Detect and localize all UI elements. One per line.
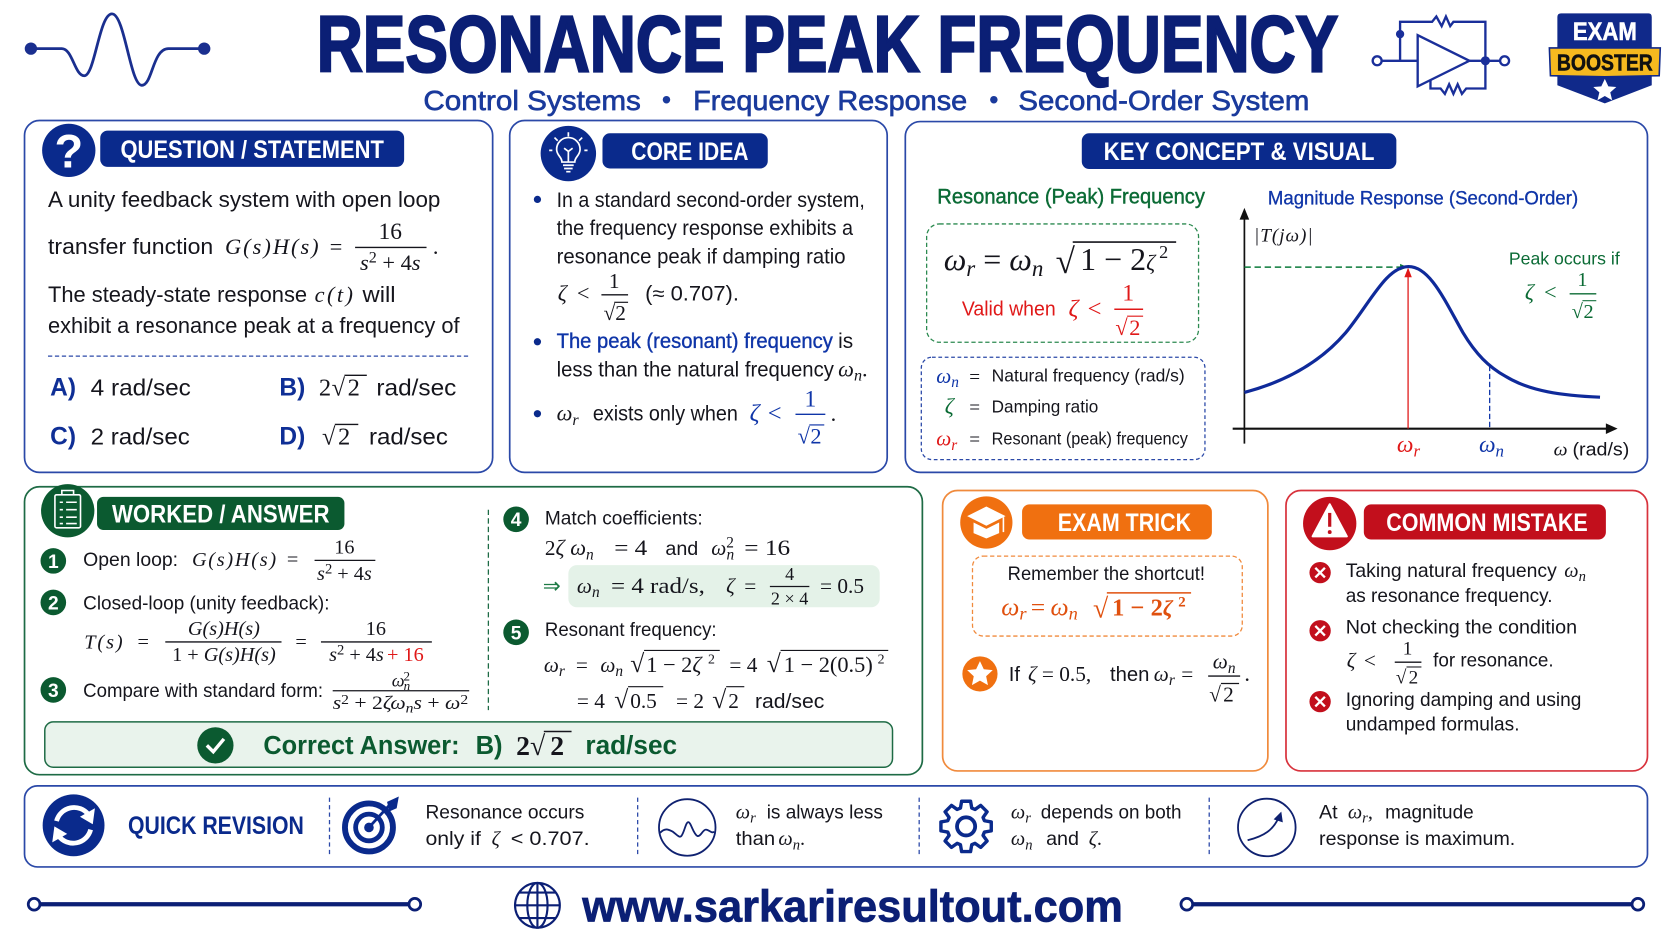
step 3: ω [392,671,405,691]
step 5: 1 − 2ζ [646,652,703,677]
legend box: = [969,430,980,451]
step 5: ω [600,653,615,677]
question text: . [433,234,439,259]
step 2: 2 [48,593,59,614]
panel: key concept and visual [905,122,1647,472]
shortcut note: = [1181,662,1193,686]
bullet 1: ζ [558,281,569,306]
bullet 3: ω [557,401,572,426]
bullet 3: 1 [805,386,816,412]
shortcut note: . [1244,661,1250,686]
footer left rule [28,898,421,910]
icon: refresh [43,794,105,856]
step 1: 1 [48,552,59,573]
icon: warning triangle [1303,497,1356,550]
question text: transfer function [48,234,213,259]
peak condition callout: 2 [1583,301,1594,323]
icon: gear [941,801,991,852]
revision item 1: < 0.707. [511,828,590,850]
revision item 4: , [1368,801,1373,823]
legend box: ω [936,427,951,451]
heading: question / statement: QUESTION / STATEMENT [120,137,384,164]
icon: target [345,797,399,851]
step 4 [503,507,880,609]
step 5: = 2 [676,689,704,713]
step 3: 2 [403,668,410,683]
answer options [50,375,457,451]
step 3: Compare with standard form: [83,680,323,702]
formula box: 1 − 2ζ [1080,242,1157,277]
step 4: n [727,546,735,563]
bullet 3: . [831,401,836,426]
bullet 2: The peak (resonant) frequency [557,330,833,353]
answer options: rad/sec [376,375,457,401]
correct answer bar: 2 [516,730,530,761]
bullet 1: 1 [609,269,620,293]
formula box: 1 [1122,281,1134,307]
revision item 3: r [1025,811,1031,827]
chart: magnitude response: ω [1397,432,1413,458]
revision item 3: ζ. [1089,828,1102,850]
chart: magnitude response: |T(jω)| [1254,226,1313,247]
heading: common mistake: COMMON MISTAKE [1386,510,1588,537]
step 5: √ [630,649,645,678]
revision item 2: ω [736,801,750,823]
revision item 2: . [800,828,805,850]
legend box: = [969,367,980,388]
peak condition callout [1509,248,1620,323]
step 5: 1 − 2(0.5) [784,652,873,677]
heading: key concept: KEY CONCEPT & VISUAL [1104,139,1375,166]
subtitle: Second-Order System [1018,85,1309,116]
revision item 3: and [1046,828,1079,850]
step 3: n [404,678,410,693]
answer options: 2 [348,375,360,402]
icon: waveform circle [659,799,716,856]
question text: exhibit a resonance peak at a frequency of [48,313,461,338]
revision item 3: ω [1011,801,1025,823]
legend box: Natural frequency (rad/s) [992,366,1185,386]
mistake 2 [1309,616,1577,689]
chart title: Magnitude Response (Second-Order) [1268,189,1578,210]
formula box: n [1032,255,1043,281]
shortcut note: n [1228,660,1236,677]
icon: rising curve [1238,799,1296,856]
answer options: A) [50,375,76,402]
formula box: = [975,242,1009,277]
answer options: 2 [319,375,331,402]
revision item 2: than [736,828,775,850]
icon: exam booster badge: EXAM [1573,19,1637,46]
step 4: n [586,546,594,563]
shortcut note: ω [1213,650,1228,674]
revision item 2: r [750,811,756,827]
subtitle: Frequency Response [693,85,967,116]
mistake 3: undamped formulas. [1346,713,1520,735]
formula box: ζ [1068,296,1080,323]
step 1: = [287,549,298,571]
step 3: ζω [383,693,403,714]
shortcut box: 2 [1178,595,1186,611]
answer options: 4 rad/sec [91,375,191,401]
revision item 3: n [1025,837,1032,853]
formula box: 2 [1159,242,1168,262]
question text: c(t) [315,282,353,307]
highlighted result [543,564,880,609]
step 4: 4 [511,510,522,531]
step 4: 2ζ ω [545,535,586,560]
bullet 3: √ [798,424,811,449]
step 3: 2 [341,692,349,707]
step 5: 2 [728,689,739,713]
highlighted result: = [744,574,756,598]
question text: s [360,250,369,275]
revision item 1: only if [425,828,481,850]
bullet 2: ω [838,356,854,381]
revision item 2 [736,801,883,853]
step 5: = [576,653,588,677]
step 2: Closed-loop (unity feedback): [83,592,329,614]
shortcut note: If [1009,664,1020,686]
shortcut note: ω [1154,662,1169,686]
shortcut box: 1 − 2ζ [1112,594,1174,621]
revision item 3: ω [1011,828,1025,850]
mistake 1: n [1579,569,1586,585]
chart: magnitude response: n [1496,441,1504,460]
step 3: s [333,693,340,714]
icon: question mark [42,124,95,177]
mistake 1: as resonance frequency. [1346,585,1553,607]
highlighted result: ⇒ [543,574,561,598]
shortcut box: ω [1001,592,1019,621]
bullet 1: resonance peak if damping ratio [557,245,846,268]
correct answer bar: rad/sec [585,732,677,760]
question text: A unity feedback system with open loop [48,187,440,212]
bullet 3: exists only when [593,403,738,426]
step 5: √ [767,649,782,678]
step 5: √ [712,685,727,714]
question text: 16 [379,219,402,245]
chart: magnitude response: r [1413,441,1420,460]
subtitle [423,84,1309,116]
step 3 [41,668,469,715]
panel: question / statement [25,120,493,472]
step 1: 2 [325,562,332,578]
step 5: r [559,663,566,680]
step 5: Resonant frequency: [545,619,717,641]
formula box: ω [1009,242,1032,277]
revision item 2: n [793,837,800,853]
step 3: + ω [427,693,458,714]
subtitle: • [662,84,671,115]
peak condition callout: ζ [1525,280,1536,305]
icon: graduation cap [960,496,1012,549]
step 1 [41,536,375,585]
question text: G(s)H(s) = [225,234,343,259]
step 4: ω [711,536,726,560]
legend box: ω [936,364,951,388]
shortcut note [1009,650,1250,707]
mistake 1: Taking natural frequency [1346,560,1557,582]
legend box: Resonant (peak) frequency [992,429,1188,449]
icon: question mark: ? [54,125,83,177]
revision item 1: ζ [492,828,502,850]
step 2: 16 [366,618,386,640]
heading: core idea [602,133,768,168]
footer right rule [1181,898,1644,910]
revision item 4: magnitude [1385,801,1474,823]
highlighted result: 4 [785,564,794,584]
step 2: + 4 [344,644,376,666]
mistake 2: √ [1396,668,1407,689]
heading: core idea: CORE IDEA [631,139,749,166]
mistake 2: 1 [1403,639,1412,660]
step 5: = 4 [577,689,605,713]
question text: 2 [369,249,377,266]
legend box: r [951,437,958,454]
step 5: 0.5 [630,689,657,713]
icon: globe [515,883,560,928]
chart: magnitude response [1233,189,1629,460]
shortcut box: r [1019,604,1027,624]
answer options: D) [279,424,305,451]
answer options: rad/sec [369,424,448,450]
highlighted result: n [592,584,600,601]
icon: exam booster badge [1549,13,1660,103]
revision item 2: is always less [767,801,883,823]
legend box: n [951,374,959,391]
shortcut box: = [1031,592,1045,621]
shortcut note: ζ = 0.5, [1028,662,1091,686]
correct answer bar: √ [530,730,546,761]
panel: common mistake [1286,491,1647,771]
step 1: 16 [334,536,355,558]
revision item 1 [425,801,590,850]
highlighted result: 2 × 4 [771,589,808,609]
bullet 2: n [854,368,862,385]
bullet 3: 2 [810,424,822,449]
formula box [927,224,1199,342]
chart: magnitude response: ω [1479,432,1496,458]
bullet 3: r [572,412,579,429]
question text [48,187,461,338]
revision item 3 [1011,801,1181,853]
formula box: r [966,255,976,281]
heading: key concept [1082,133,1396,169]
shortcut box: ω [1051,592,1069,621]
shortcut box: n [1069,604,1078,624]
step 4: and [665,538,698,560]
heading: exam trick [1022,504,1212,540]
correct answer bar: B) [476,732,503,760]
step 2: s+ 16 [376,644,424,666]
step 1: G(s)H(s) [192,549,276,571]
question text: s [412,250,421,275]
formula box: ω [944,242,966,277]
step 5: 2 [878,651,885,666]
mistake 3 [1309,689,1581,735]
step 2: 1 + G(s)H(s) [172,644,276,666]
answer options: √ [332,375,346,402]
panel: exam trick [943,491,1268,771]
step 5: √ [614,685,629,714]
step 5: 5 [511,623,522,644]
shortcut note: r [1169,672,1176,689]
revision item 4: response is maximum. [1319,828,1515,850]
answer options: 2 [338,424,350,451]
shortcut note: then [1110,664,1149,686]
answer options: C) [50,424,76,451]
legend box: = [969,398,980,419]
question text: will [361,282,396,307]
peak condition callout: √ [1572,301,1584,323]
icon: star [962,656,998,692]
bullet 2: . [862,356,868,381]
bullet 1: In a standard second-order system, [557,189,865,212]
step 2: = [295,631,307,653]
step 2 [41,590,432,666]
shortcut box: √ [1093,592,1109,623]
revision item 4 [1319,801,1515,850]
panel: worked answer [25,484,922,775]
formula box: 2 [1129,315,1140,340]
mistake 2: for resonance. [1433,649,1554,671]
header wave icon [26,14,209,85]
step 2: = [138,631,149,653]
heading: exam trick: EXAM TRICK [1058,510,1191,537]
bullet 2 [534,330,868,385]
bullet 1: 2 [615,301,626,325]
chart: magnitude response: ω (rad/s) [1554,438,1629,460]
legend box [921,357,1205,460]
mistake 1: ω [1564,560,1579,582]
mistake 3: Ignoring damping and using [1346,689,1581,711]
mistake 2: ζ [1347,649,1357,673]
revision item 3: depends on both [1041,801,1181,823]
panel: core idea [510,120,887,472]
step 5: 2 [708,651,715,666]
answer options: B) [279,375,305,402]
subheading: resonance frequency: Resonance (Peak) Frequency [937,185,1205,209]
step 3: + 2 [349,693,383,714]
peak condition callout: Peak occurs if [1509,248,1620,268]
bullet 1: √ [604,301,616,325]
heading: worked answer: WORKED / ANSWER [112,501,330,528]
highlighted result: = 4 rad/s, [611,573,705,598]
shortcut note: √ [1209,683,1221,707]
step 1: s [317,563,325,585]
icon: exam booster badge: BOOSTER [1557,49,1653,75]
icon: light bulb [541,126,596,181]
subtitle: Control Systems [423,85,641,116]
bullet 3 [534,386,836,449]
bullet 2: less than the natural frequency [557,358,834,381]
mistake 1 [1309,560,1586,607]
bullet 1: (≈ 0.707). [645,283,739,306]
answer options: √ [322,424,336,451]
step 3: 2 [460,692,468,707]
bullet 1 [534,189,865,325]
icon: op-amp circuit [1373,17,1509,94]
highlighted result: ζ [726,574,736,598]
step 2: 2 [337,643,344,659]
formula box: < [1088,296,1101,323]
heading: quick revision: QUICK REVISION [128,813,304,840]
correct answer bar [45,722,893,767]
step 2: T(s) [84,631,123,653]
mistake 2: < [1364,649,1376,673]
icon: clipboard [41,484,94,537]
peak condition callout: < [1544,280,1557,305]
step 4: 2 [726,535,734,552]
heading: common mistake [1364,504,1606,540]
formula box: √ [1056,242,1076,281]
title: RESONANCE PEAK FREQUENCY [317,0,1338,88]
website url: www.sarkariresultout.com [581,881,1123,931]
step 4: = 16 [744,535,790,560]
shortcut note: 2 [1223,683,1234,707]
shortcut box [972,556,1242,636]
question text: The steady-state response [48,282,307,307]
highlighted result: = 0.5 [820,574,864,598]
step 3: 3 [48,681,59,702]
bullet 3: ζ [750,400,762,427]
bullet 1: < [577,281,590,306]
revision item 4: r [1362,811,1368,827]
heading: question / statement [100,131,404,167]
bullet 1: the frequency response exhibits a [557,217,853,240]
answer options: 2 rad/sec [91,424,190,450]
step 5: rad/sec [755,691,824,713]
peak condition callout: 1 [1577,269,1587,291]
revision item 2: ω [778,828,793,850]
step 1: + 4 [332,563,364,585]
legend box: ζ [945,394,956,419]
step 1: Open loop: [83,549,178,571]
correct answer bar: Correct Answer: [263,732,460,760]
step 5: = 4 [729,653,758,677]
mistake 2: 2 [1409,668,1418,689]
step 2: s [329,644,337,666]
revision item 4: At [1319,801,1338,823]
bullet 2: is [838,330,853,353]
panel: quick revision [25,786,1647,867]
highlighted result: ω [577,574,592,598]
formula box: √ [1115,315,1128,340]
step 2: G(s)H(s) [188,618,260,640]
step 5: n [615,663,623,680]
revision item 4: ω [1348,801,1362,823]
revision item 1: Resonance occurs [425,801,584,823]
step 1: s [364,563,372,585]
step 5: ω [544,653,559,677]
shortcut box: Remember the shortcut! [1008,564,1205,585]
step 5 [503,619,888,714]
question text: + 4 [377,250,412,275]
step 4: = 4 [614,535,647,560]
step 3: n [406,700,414,715]
subtitle: • [989,84,999,115]
formula box: Valid when [962,299,1056,321]
correct answer bar: 2 [550,730,564,761]
bullet 3: < [768,400,782,427]
step 4: Match coefficients: [545,508,703,530]
mistake 2: Not checking the condition [1346,616,1577,638]
step 3: s [413,693,422,714]
legend box: Damping ratio [992,397,1099,417]
